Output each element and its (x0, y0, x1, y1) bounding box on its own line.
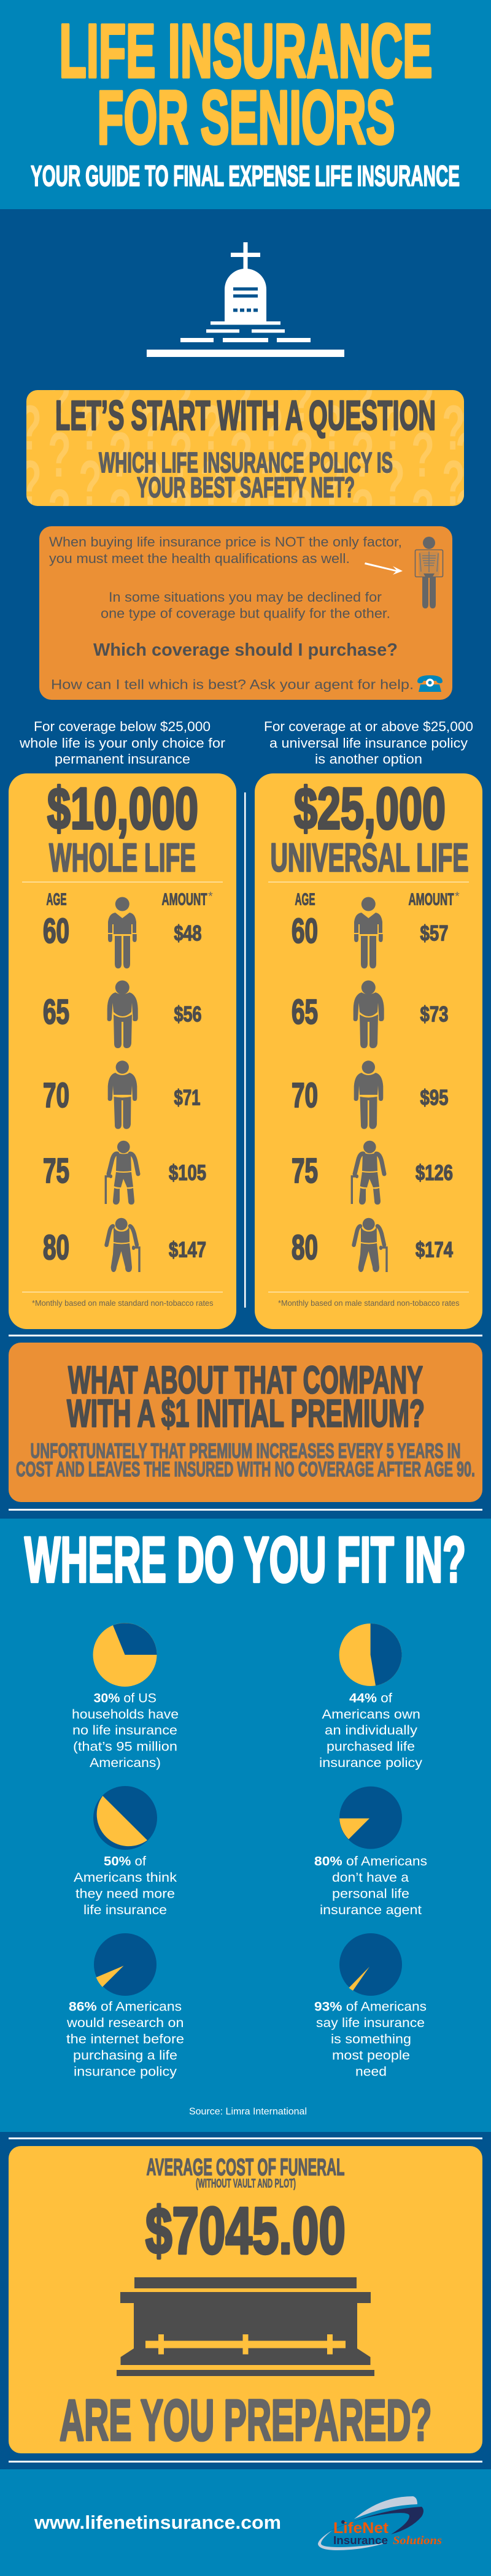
table headers (295, 889, 460, 909)
panel: question: ? (442, 393, 465, 464)
stat: 86 percent (66, 1999, 184, 2079)
stat: 86 percent: insurance policy (74, 2064, 177, 2079)
footnote: *Monthly based on male standard non-tobacco rates (278, 1298, 460, 1308)
pie chart: 86 percent (94, 1933, 157, 1996)
text: coverage below 25000: For coverage below $25,000 (34, 719, 211, 734)
ages: 60 (43, 911, 69, 951)
icon: telephone (417, 675, 443, 692)
stat: 80 percent: 80% of Americans (314, 1855, 427, 1868)
amounts: $57 (420, 921, 448, 945)
icon: person age 75 with cane (352, 1141, 384, 1205)
ages: 75 (292, 1151, 318, 1190)
text: coverage below 25000 (19, 719, 225, 767)
amounts: $147 (169, 1238, 206, 1262)
heading (67, 1359, 425, 1435)
icon: person age 65 (107, 980, 138, 1048)
icon: person age 60 (354, 897, 383, 968)
logo: LifeNet (333, 2520, 389, 2537)
ages (292, 911, 318, 1267)
website: www.lifenetinsurance.com (34, 2512, 281, 2533)
pie chart: 50 percent (93, 1786, 157, 1850)
stat: 44 percent: purchased life (327, 1739, 415, 1754)
footer (0, 2469, 491, 2576)
table headers (47, 889, 213, 909)
amounts (169, 921, 206, 1262)
panel: one dollar premium (9, 1343, 482, 1502)
panel: question: ? (79, 448, 102, 519)
panel: question: ? (442, 448, 465, 519)
panel: question: ? (48, 364, 71, 435)
icon: person age 65 (354, 980, 384, 1048)
text: coverage below 25000: permanent insurance (55, 751, 190, 767)
stat: 30 percent: Americans) (90, 1756, 161, 1770)
amounts (416, 921, 453, 1262)
body text (49, 534, 414, 692)
ages: 60 (292, 911, 318, 951)
stat: 93 percent: need (355, 2064, 387, 2079)
stat: 86 percent: the internet before (66, 2033, 184, 2047)
panel: question: ? (230, 364, 253, 435)
panel: question: ? (109, 420, 132, 491)
amounts: $95 (420, 1086, 448, 1110)
panel: question: ? (200, 448, 223, 519)
body text: How can I tell which is best? Ask your agent for help. (51, 677, 414, 692)
icon: person age 80 with cane (354, 1218, 387, 1272)
icon: person age 70 (108, 1060, 137, 1129)
footnote: *Monthly based on male standard non-tobacco rates (32, 1298, 214, 1308)
ages: 80 (43, 1228, 69, 1267)
pie chart: 93 percent (339, 1933, 402, 1996)
section: where do you fit in (0, 1519, 491, 2132)
panel: question: ? (290, 420, 314, 491)
icon: x-ray figure (415, 537, 443, 608)
logo: Insurance (333, 2534, 388, 2547)
question text: YOUR BEST SAFETY NET? (137, 471, 355, 503)
panel: question: ? (230, 420, 253, 491)
panel: question: ? (351, 477, 374, 548)
text: coverage above 25000 (264, 719, 473, 767)
stat: 50 percent: Americans think (74, 1871, 177, 1885)
amounts: $48 (174, 921, 201, 945)
stat: 44 percent (319, 1692, 423, 1770)
panel: question: ? (321, 393, 344, 464)
amounts: $71 (174, 1086, 200, 1110)
panel: question: ? (79, 393, 102, 464)
table headers: AMOUNT (409, 889, 454, 909)
panel: question: ? (411, 364, 435, 435)
body text: In some situations you may be declined for (109, 589, 382, 605)
text: coverage below 25000: whole life is your only choice for (19, 735, 225, 751)
panel: question: ? (290, 364, 314, 435)
stat: 86 percent: 86% of Americans (69, 1999, 182, 2014)
ages: 80 (292, 1228, 318, 1267)
stat: 30 percent: (that’s 95 million (73, 1739, 177, 1754)
center divider (244, 792, 246, 1308)
stat: 93 percent (314, 1999, 427, 2079)
amounts: $105 (169, 1161, 206, 1185)
body text: you must meet the health qualifications as well. (49, 551, 350, 566)
amount heading: $10,000 (47, 776, 198, 841)
subheading: (WITHOUT VAULT AND PLOT) (196, 2177, 296, 2191)
panel: question: ? (139, 448, 163, 519)
panel: question: ? (351, 420, 374, 491)
stat: 44 percent: 44% of (349, 1692, 392, 1705)
panel: question: ? (169, 477, 193, 548)
panel: question (26, 390, 464, 506)
price: $7045.00 (145, 2193, 346, 2267)
icon: person age 80 with cane (107, 1218, 139, 1272)
pie chart: 80 percent (339, 1787, 402, 1849)
amounts: $174 (416, 1238, 453, 1262)
panel: question: ? (290, 477, 314, 548)
panel: question: ? (48, 420, 71, 491)
panel: question: ? (18, 393, 42, 464)
stat: 80 percent: don’t have a (332, 1871, 409, 1885)
stat: 93 percent: say life insurance (316, 2016, 425, 2030)
icon: person age 70 (354, 1060, 383, 1129)
text: coverage above 25000: For coverage at or above $25,000 (264, 719, 473, 734)
panel: question: ? (260, 393, 284, 464)
panel: question: ? (18, 448, 42, 519)
ages (43, 911, 69, 1267)
panel: question: ? (411, 420, 435, 491)
panel: question: ? (382, 393, 405, 464)
stat: 50 percent: they need more (75, 1887, 175, 1901)
stat: 50 percent (74, 1855, 177, 1917)
arrow (365, 562, 403, 575)
body text: When buying life insurance price is NOT the only factor, (49, 534, 402, 550)
panel: question: ? (169, 420, 193, 491)
stat: 93 percent: is something (331, 2033, 411, 2047)
stat: 44 percent: insurance policy (319, 1756, 423, 1770)
stat: 93 percent: 93% of Americans (314, 1999, 427, 2014)
amounts: $126 (416, 1161, 453, 1185)
policy name: WHOLE LIFE (49, 835, 196, 880)
icon: coffin (117, 2277, 374, 2376)
table headers: * (208, 890, 213, 903)
panel: question: ? (411, 477, 435, 548)
stat: 86 percent: purchasing a life (73, 2049, 177, 2063)
table headers: * (455, 890, 460, 903)
ages: 75 (43, 1151, 69, 1190)
table headers: AGE (295, 889, 315, 909)
header section (0, 0, 491, 209)
ages: 70 (292, 1076, 318, 1115)
stat: 80 percent: personal life (332, 1887, 409, 1901)
icon: person age 75 with cane (106, 1141, 138, 1205)
question text (99, 447, 393, 503)
text: coverage above 25000: is another option (315, 751, 422, 767)
amounts: $56 (174, 1002, 201, 1026)
stat: 30 percent: 30% of US (93, 1692, 157, 1705)
stat: 44 percent: Americans own (322, 1708, 420, 1722)
panel: question: ? (260, 448, 284, 519)
stat: 30 percent: no life insurance (72, 1723, 177, 1738)
panel: question: ? (109, 364, 132, 435)
panel: question: ? (200, 393, 223, 464)
panel: question: ? (48, 477, 71, 548)
title (59, 9, 432, 160)
icon: gravestone (147, 242, 344, 357)
icon: person age 60 (108, 897, 137, 968)
stat: 80 percent: insurance agent (320, 1903, 422, 1917)
explanation (16, 1439, 475, 1481)
stat: 93 percent: most people (332, 2049, 410, 2063)
source: Source: Limra International (189, 2106, 307, 2117)
pie chart: 30 percent (93, 1623, 157, 1687)
stat: 50 percent: 50% of (104, 1855, 146, 1868)
panel: question: ? (351, 364, 374, 435)
panel: health qualifications (39, 526, 452, 700)
panel: question: ? (321, 448, 344, 519)
ages: 65 (292, 992, 318, 1032)
body text: Which coverage should I purchase? (93, 640, 398, 660)
logo: Solutions (393, 2534, 442, 2547)
panel: question: ? (109, 477, 132, 548)
text: coverage above 25000: a universal life insurance policy (269, 735, 468, 751)
table headers: AMOUNT (162, 889, 207, 909)
table headers: AGE (47, 889, 66, 909)
stat: 80 percent (314, 1855, 427, 1917)
amounts: $73 (420, 1002, 448, 1026)
stat: 86 percent: would research on (66, 2016, 184, 2030)
stat: 30 percent: households have (72, 1708, 179, 1722)
panel: funeral cost (9, 2146, 482, 2453)
panel: universal life (255, 773, 482, 1329)
logo (318, 2496, 442, 2550)
pie chart: 44 percent (339, 1623, 402, 1686)
ages: 65 (43, 992, 69, 1032)
panel: question: ? (169, 364, 193, 435)
panel: question: ? (382, 448, 405, 519)
panel: question: ? (139, 393, 163, 464)
stat: 44 percent: an individually (325, 1723, 418, 1738)
panel: whole life (9, 773, 236, 1329)
body text: one type of coverage but qualify for the other. (101, 606, 390, 621)
stat: 50 percent: life insurance (83, 1903, 167, 1917)
ages: 70 (43, 1076, 69, 1115)
heading: AVERAGE COST OF FUNERAL (146, 2155, 345, 2181)
stat: 30 percent (72, 1692, 179, 1770)
panel: question: ? (230, 477, 253, 548)
